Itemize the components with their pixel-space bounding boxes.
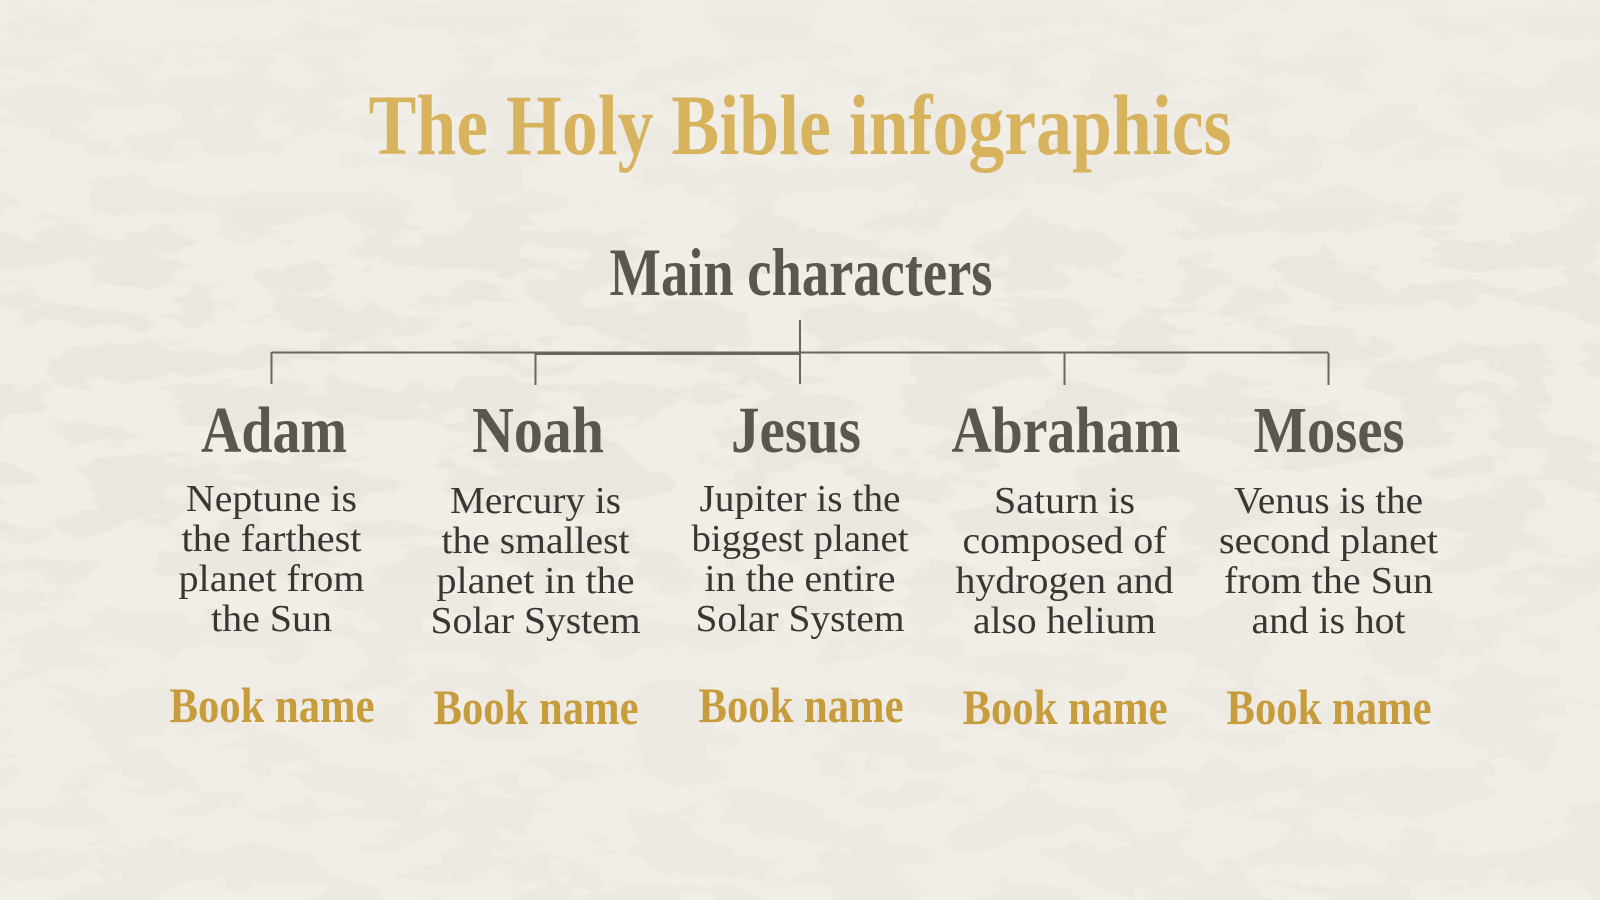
description: Adam: the farthest (182, 518, 362, 560)
name: Moses: Moses (1254, 394, 1404, 467)
description: Abraham: Saturn is (994, 480, 1135, 522)
description: Adam: Neptune is (186, 478, 357, 520)
description: Jesus: Solar System (696, 598, 904, 640)
description: Abraham (956, 480, 1174, 642)
name: Abraham: Abraham (952, 394, 1180, 467)
book label: Adam: Book name (170, 677, 374, 733)
description: Noah (430, 480, 640, 642)
description: Moses: and is hot (1252, 600, 1406, 642)
description: Moses (1219, 480, 1438, 642)
name: Adam: Adam (201, 394, 347, 467)
description: Noah: Solar System (430, 600, 640, 642)
book label: Noah: Book name (434, 679, 638, 735)
heading: main characters: Main characters (610, 234, 992, 310)
panel: Abraham (952, 394, 1180, 735)
background: parchment texture (14, 525, 224, 526)
tree connector lines (272, 320, 1328, 385)
description: Noah: Mercury is (450, 480, 621, 522)
description: Jesus: in the entire (704, 558, 896, 600)
panel: Adam (170, 394, 374, 733)
title: The Holy Bible infographics (368, 77, 1232, 173)
description: Abraham: composed of (962, 520, 1167, 562)
description: Moses: Venus is the (1234, 480, 1423, 522)
description: Abraham: also helium (973, 600, 1156, 642)
description: Jesus: Jupiter is the (700, 478, 900, 520)
description: Abraham: hydrogen and (956, 560, 1174, 602)
book label: Jesus: Book name (698, 677, 904, 733)
description: Jesus (692, 478, 909, 640)
panel: Moses (1219, 394, 1438, 735)
description: Jesus: biggest planet (692, 518, 909, 560)
description: Adam (178, 478, 364, 640)
description: Noah: the smallest (442, 520, 630, 562)
panel: Jesus (692, 394, 909, 733)
description: Moses: second planet (1219, 520, 1438, 562)
book label: Abraham: Book name (962, 679, 1168, 735)
description: Adam: the Sun (211, 598, 332, 640)
book label: Moses: Book name (1226, 679, 1432, 735)
description: Adam: planet from (178, 558, 364, 600)
name: Jesus: Jesus (731, 394, 861, 467)
panel: Noah (430, 394, 640, 735)
description: Noah: planet in the (436, 560, 634, 602)
description: Moses: from the Sun (1224, 560, 1433, 602)
name: Noah: Noah (472, 394, 604, 467)
